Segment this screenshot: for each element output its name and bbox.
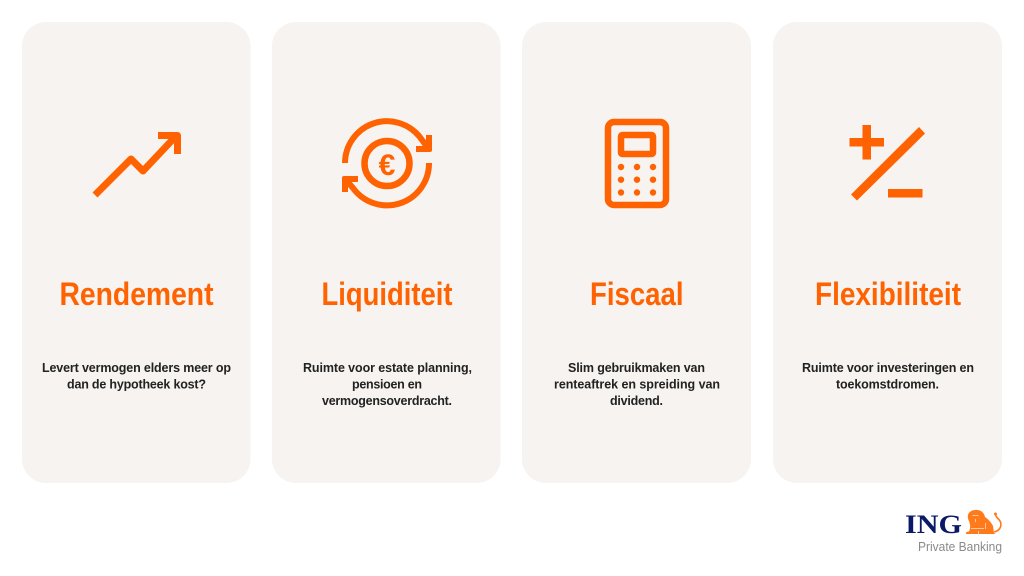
text: Rendement description: dan de hypotheek kost? (67, 378, 206, 392)
heading: Flexibiliteit: Flexibiliteit (815, 276, 961, 312)
text: Fiscaal description: dividend. (610, 394, 663, 408)
text: Liquiditeit description: pensioen en (352, 378, 422, 392)
text: Liquiditeit description: Ruimte voor estate planning, (303, 361, 472, 375)
icon: euro coin with circular arrows (342, 121, 432, 205)
icon: calculator (608, 122, 666, 205)
panel: Flexibiliteit (773, 22, 1002, 483)
logo: ING Private Banking (905, 510, 1002, 554)
text: Flexibiliteit description: toekomstdromen. (836, 378, 939, 392)
text: Fiscaal description: renteaftrek en spreiding van (554, 378, 720, 392)
text: Liquiditeit description (303, 361, 472, 408)
text: Flexibiliteit description (802, 361, 974, 392)
icon: rising trend arrow (95, 136, 178, 195)
heading: Liquiditeit: Liquiditeit (322, 276, 453, 312)
text: Fiscaal description: Slim gebruikmaken van (568, 361, 705, 375)
heading: Fiscaal: Fiscaal (590, 276, 684, 312)
text: Liquiditeit description: vermogensoverdracht. (322, 394, 452, 408)
text: Rendement description: Levert vermogen elders meer op (42, 361, 231, 375)
panel: Liquiditeit (272, 22, 500, 483)
icon: euro coin with circular arrows: € (379, 149, 396, 182)
text: Fiscaal description (554, 361, 720, 408)
text: Flexibiliteit description: Ruimte voor investeringen en (802, 361, 974, 375)
icon: lion (966, 510, 1001, 534)
logo wordmark: ING: ING (905, 510, 962, 539)
text: Private Banking: Private Banking (918, 539, 1002, 554)
heading: Rendement: Rendement (60, 276, 214, 312)
icon: plus minus (850, 125, 925, 200)
panel: Fiscaal (522, 22, 751, 483)
text: Rendement description (42, 361, 231, 392)
panel: Rendement (22, 22, 250, 483)
